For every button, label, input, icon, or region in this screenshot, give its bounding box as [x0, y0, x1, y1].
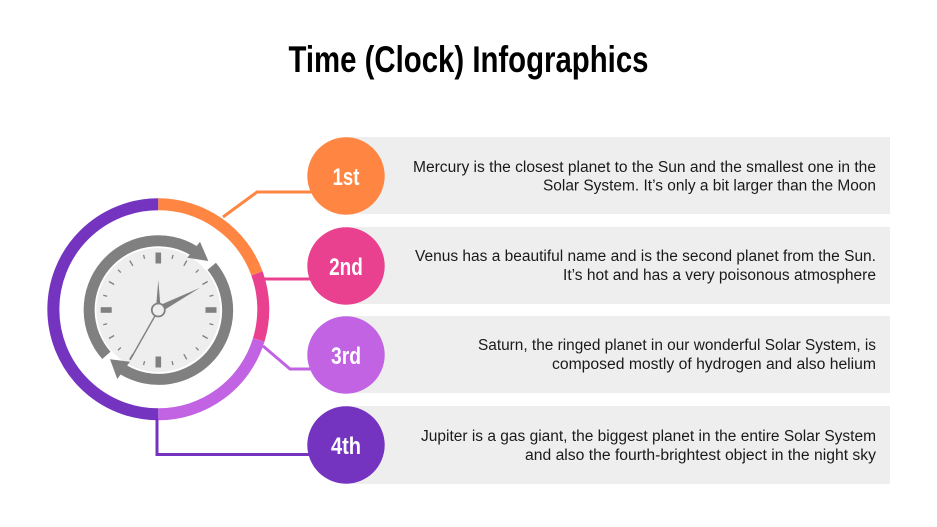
text: Venus	[415, 248, 876, 284]
hour ticks	[101, 252, 216, 368]
clock face	[96, 248, 220, 372]
text: Saturn	[478, 337, 876, 373]
segmented ring	[53, 204, 263, 414]
text: Saturn: Saturn, the ringed planet in our wonderful Solar System, is	[478, 337, 876, 354]
clock centre	[152, 304, 165, 316]
badge: 4th: 4th	[331, 433, 361, 460]
badge: 1st	[307, 137, 385, 215]
minute ticks	[103, 255, 213, 365]
badge: 2nd	[307, 227, 385, 305]
badge: 3rd	[307, 316, 385, 394]
text: Jupiter	[421, 428, 876, 464]
clock icon	[89, 241, 228, 379]
row 1 band	[346, 137, 890, 214]
text: Venus: Venus has a beautiful name and is the second planet from the Sun.	[415, 248, 876, 265]
rotation arrow: bottom	[110, 266, 228, 379]
badge: 1st: 1st	[333, 164, 359, 191]
hands	[130, 280, 200, 360]
text: Saturn: composed mostly of hydrogen and also helium	[552, 356, 876, 373]
connector: light purple	[263, 346, 312, 369]
badge: 3rd: 3rd	[331, 343, 361, 370]
text: Venus: It’s hot and has a very poisonous atmosphere	[563, 267, 876, 284]
text: Mercury: Mercury is the closest planet to the Sun and the smallest one in the	[413, 159, 876, 176]
text: Mercury: Solar System. It’s only a bit larger than the Moon	[543, 178, 876, 194]
badge: 2nd: 2nd	[329, 254, 363, 281]
text: Mercury	[413, 159, 876, 194]
text: Jupiter: Jupiter is a gas giant, the biggest planet in the entire Solar System	[421, 428, 876, 445]
ring segment: light purple	[158, 340, 259, 414]
row 2 band	[346, 227, 890, 304]
text: Jupiter: and also the fourth-brightest object in the night sky	[525, 447, 876, 464]
connector: pink	[264, 278, 312, 280]
row 4 band	[346, 406, 890, 484]
rotation arrow: top	[89, 241, 208, 355]
ring segment: dark purple	[53, 204, 158, 414]
ring segment: orange	[158, 204, 257, 273]
connector: dark purple	[157, 418, 312, 454]
badge: 4th	[307, 406, 385, 484]
row 3 band	[346, 316, 890, 393]
connector: orange	[223, 192, 312, 217]
title: Time (Clock) Infographics	[288, 39, 648, 80]
ring segment: pink	[257, 273, 263, 340]
